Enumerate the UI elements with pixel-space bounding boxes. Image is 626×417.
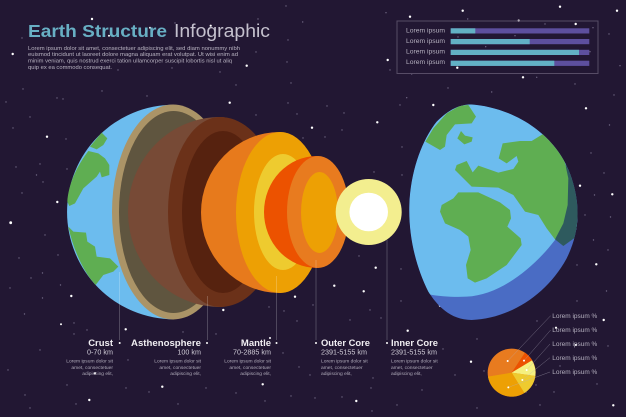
pie legend labels: Lorem ipsum %: [552, 369, 598, 376]
mantle layer: [201, 132, 324, 293]
label: inner core: Lorem ipsum dolor sit: [391, 358, 438, 364]
label: crust: Crust: [88, 338, 114, 349]
intro text block: minim veniam, quis nostrud exerci tation ullamcorper suscipit lobortis nisl ut aliq: [28, 59, 232, 65]
label: mantle: Mantle: [241, 338, 271, 349]
label: crust: [66, 272, 121, 377]
label: outer core: adipiscing elit,: [321, 371, 352, 377]
label: mantle: [224, 276, 278, 377]
crust layer: [112, 104, 234, 320]
pie legend labels: Lorem ipsum %: [552, 327, 598, 334]
pie chart: [488, 313, 598, 397]
intro text block: Lorem ipsum dolor sit amet, consectetuer adipiscing elit, sed diam nonummy nibh: [28, 46, 240, 52]
label: mantle: Lorem ipsum dolor sit: [224, 358, 272, 364]
bar row 2: [406, 38, 589, 45]
label: asthenosphere: Asthenosphere: [131, 338, 201, 349]
label: inner core: 2391-5155 km: [391, 348, 437, 356]
pie legend labels: Lorem ipsum %: [552, 313, 598, 320]
intro text block: euismod tincidunt ut laoreet dolore magna aliquam erat volutpat. Ut wisi enim ad: [28, 52, 238, 58]
label: outer core: Lorem ipsum dolor sit: [321, 358, 368, 364]
label: asthenosphere: Lorem ipsum dolor sit: [154, 358, 202, 364]
label: outer core: amet, consectetuer: [321, 365, 363, 371]
label: asthenosphere: adipiscing elit,: [170, 371, 201, 377]
label: inner core: [386, 240, 438, 377]
label: mantle: adipiscing elit,: [240, 371, 271, 377]
left globe surface: [67, 105, 174, 319]
bar row 1: [406, 28, 589, 34]
right globe: [409, 104, 578, 320]
pie legend labels: Lorem ipsum %: [552, 341, 598, 348]
label: asthenosphere: amet, consectetuer: [159, 365, 201, 371]
label: outer core: 2391-5155 km: [321, 348, 367, 356]
bar row 3: Lorem ipsum: [406, 48, 445, 56]
night side shadow: [555, 164, 578, 246]
label: outer core: Outer Core: [321, 338, 370, 349]
land masses: [425, 105, 568, 283]
outer core layer: [264, 156, 349, 268]
bar row 2: Lorem ipsum: [406, 38, 445, 45]
label: inner core: adipiscing elit,: [391, 371, 422, 377]
bar row 4: Lorem ipsum: [406, 59, 445, 66]
inner core: [336, 179, 402, 245]
title: Infographic: [174, 21, 270, 41]
panel: bar legend: [397, 21, 598, 74]
bar row 1: Lorem ipsum: [406, 28, 445, 34]
label: crust: Lorem ipsum dolor sit: [66, 358, 114, 364]
pie legend labels: [552, 313, 598, 376]
label: asthenosphere: [131, 296, 208, 377]
title: Earth Structure: [28, 21, 167, 41]
earth cross-section diagram: [67, 104, 402, 320]
label: inner core: Inner Core: [391, 338, 438, 349]
title: [28, 21, 270, 41]
ocean: [409, 104, 580, 297]
label: mantle: amet, consectetuer: [229, 365, 271, 371]
label: crust: amet, consectetuer: [71, 365, 113, 371]
label: outer core: [315, 260, 370, 377]
intro text block: quip ex ea commodo consequat.: [28, 65, 112, 71]
label: crust: 0-70 km: [87, 348, 113, 356]
intro text block: [28, 46, 240, 71]
label: inner core: amet, consectetuer: [391, 365, 433, 371]
pie legend labels: Lorem ipsum %: [552, 355, 598, 362]
label: crust: adipiscing elit,: [82, 371, 113, 377]
asthenosphere layer: [128, 117, 275, 307]
label: asthenosphere: 100 km: [177, 348, 201, 356]
bar row 3: [406, 48, 589, 56]
bar row 4: [406, 59, 589, 66]
label: mantle: 70-2885 km: [233, 348, 271, 356]
